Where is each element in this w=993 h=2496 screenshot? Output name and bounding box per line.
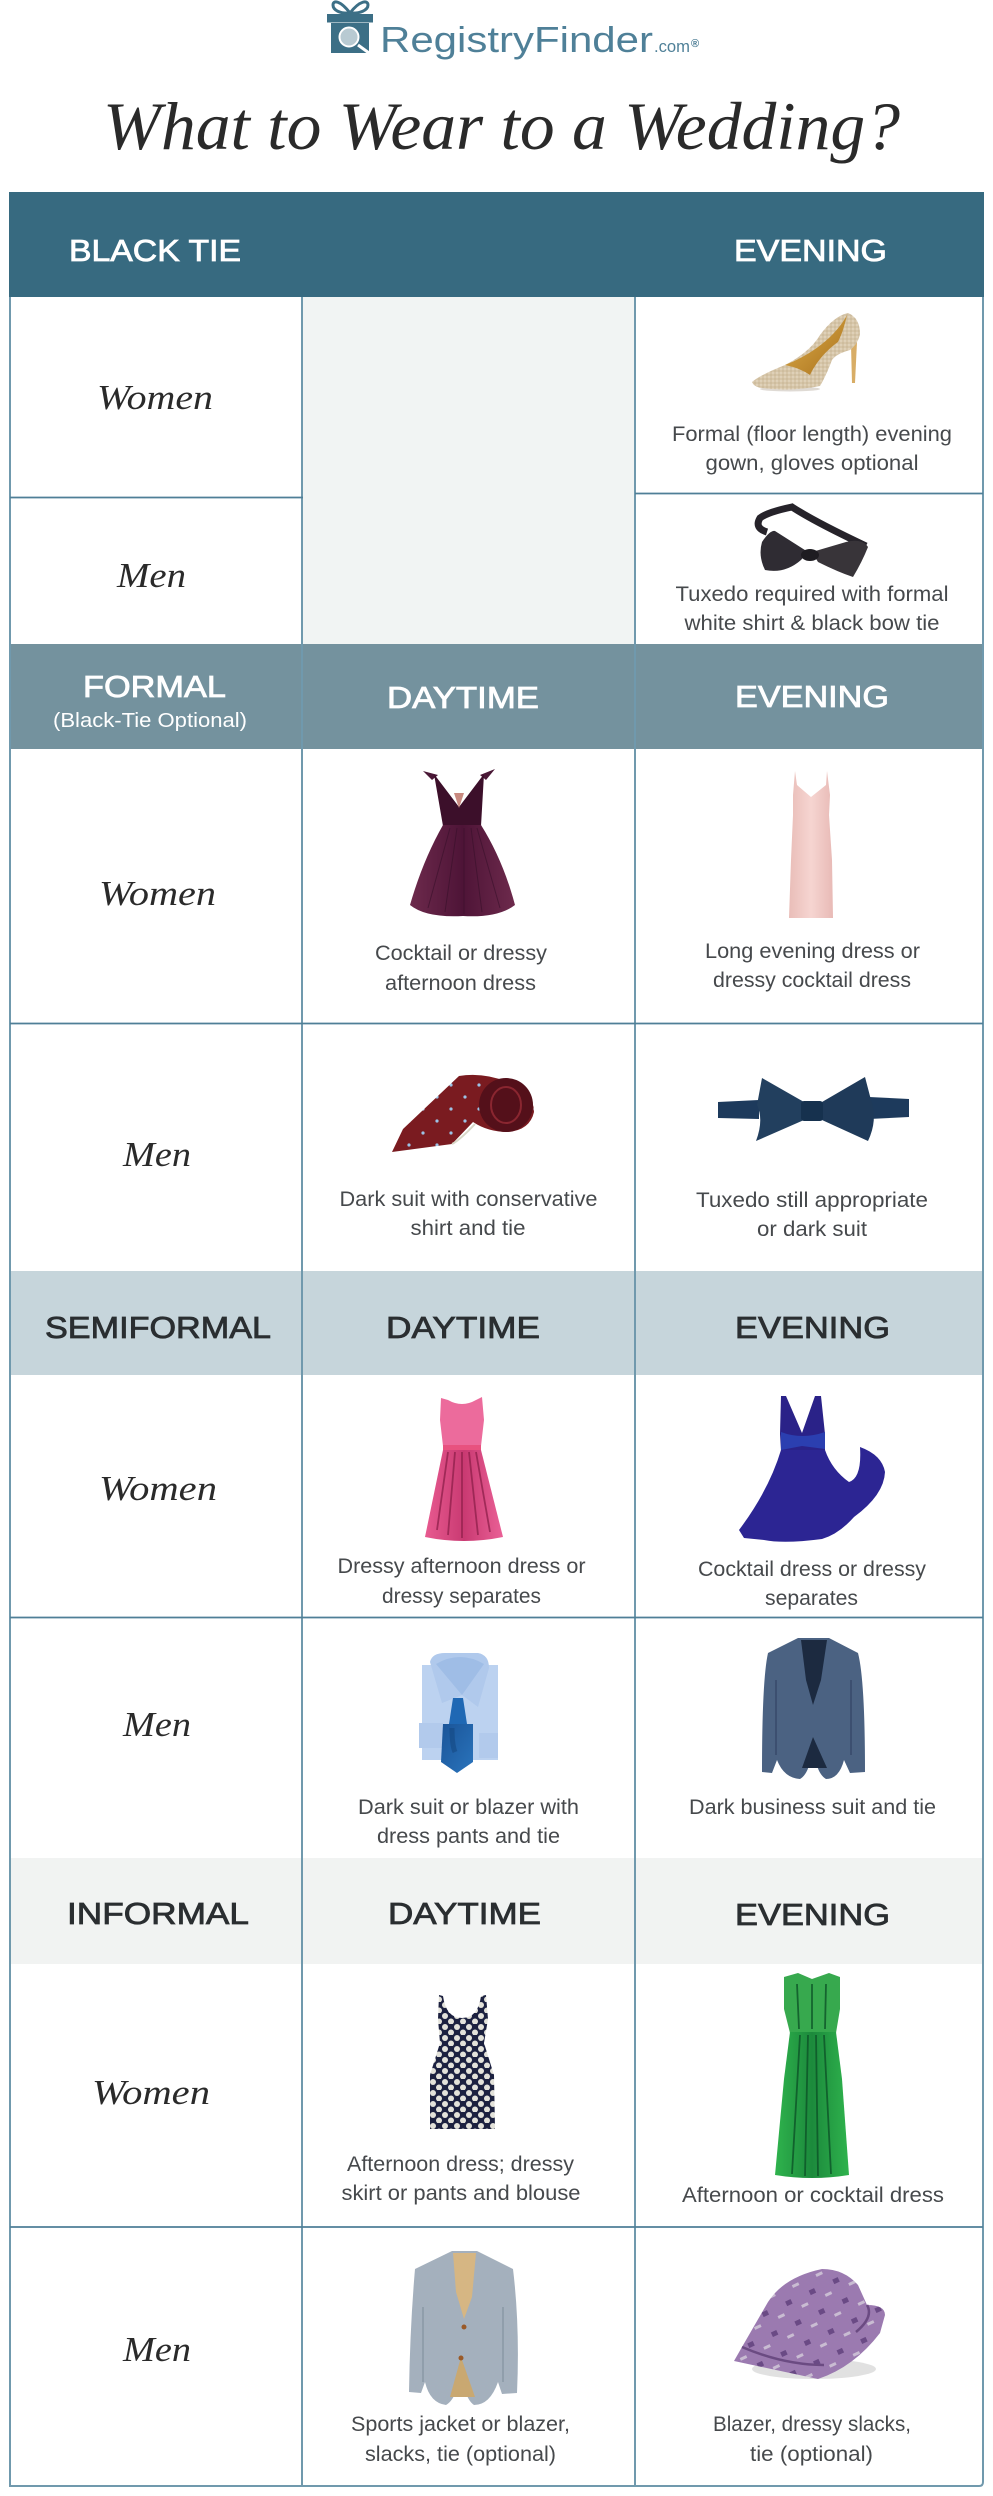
caption: women evening: gown, gloves optional: [706, 452, 918, 475]
caption: men daytime: Dark suit with conservative: [340, 1188, 598, 1211]
icon: navy bow tie: [718, 1077, 909, 1141]
caption: women daytime: [342, 2153, 580, 2205]
row label: men: Men: [116, 556, 186, 595]
caption: women daytime: Dressy afternoon dress or: [338, 1555, 586, 1578]
icon: grey sports jacket: [409, 2251, 518, 2405]
caption: men daytime: [358, 1796, 579, 1848]
icon: blue swing dress: [739, 1396, 885, 1542]
caption: men evening: [676, 583, 948, 635]
caption: women daytime: afternoon dress: [385, 972, 536, 995]
icon: burgundy cocktail dress: [410, 769, 515, 916]
icon: polka dot dress: [430, 1995, 495, 2129]
section: informal: [67, 1896, 944, 2466]
heading: evening: EVENING: [735, 679, 889, 714]
registered mark: ®: [691, 38, 699, 50]
heading: black tie: BLACK TIE: [69, 233, 241, 268]
icon: pink slip dress: [789, 771, 833, 918]
row label: men: Men: [122, 1135, 191, 1174]
caption: women daytime: Cocktail or dressy: [375, 942, 548, 965]
caption: men evening: Tuxedo required with formal: [676, 583, 948, 606]
caption: men daytime: dress pants and tie: [377, 1825, 560, 1848]
heading: evening: EVENING: [735, 1897, 890, 1932]
caption: men evening: Dark business suit and tie: [689, 1796, 936, 1819]
row label: men: Men: [122, 2330, 191, 2369]
caption: women evening: dressy cocktail dress: [713, 969, 911, 992]
heading: semiformal: SEMIFORMAL: [45, 1310, 271, 1345]
heading: daytime: DAYTIME: [387, 680, 539, 715]
caption: men evening: [696, 1189, 928, 1241]
caption: men evening: [713, 2413, 911, 2466]
caption: women evening: separates: [765, 1587, 858, 1610]
logo: RegistryFinder: [327, 2, 699, 60]
caption: women evening: Cocktail dress or dressy: [698, 1558, 926, 1581]
caption: women daytime: [375, 942, 548, 995]
heading: evening: EVENING: [734, 233, 887, 268]
heading: formal: FORMAL: [83, 669, 226, 704]
caption: women daytime: Afternoon dress; dressy: [347, 2153, 575, 2176]
icon: navy blazer: [762, 1638, 865, 1779]
section: semiformal: [45, 1310, 936, 1848]
title: What to Wear to a Wedding?: [103, 88, 900, 164]
section: black tie: [69, 233, 952, 635]
caption: women evening: [698, 1558, 926, 1610]
row label: women: Women: [92, 2073, 210, 2112]
caption: women evening: [705, 940, 920, 992]
subheading: black-tie optional: (Black-Tie Optional): [53, 710, 247, 732]
heading: evening: EVENING: [735, 1310, 890, 1345]
caption: women evening: Long evening dress or: [705, 940, 920, 963]
caption: men evening: white shirt & black bow tie: [683, 612, 940, 635]
icon: purple folded tie: [734, 2269, 885, 2379]
caption: women evening: Formal (floor length) evening: [672, 423, 952, 446]
caption: women daytime: skirt or pants and blouse: [342, 2182, 580, 2205]
icon: dark red tie: [392, 1075, 534, 1152]
caption: men daytime: [351, 2413, 570, 2466]
row label: women: Women: [99, 1469, 217, 1508]
caption: men daytime: Dark suit or blazer with: [358, 1796, 579, 1819]
caption: women evening: [672, 423, 952, 475]
row label: women: Women: [97, 378, 213, 417]
heading: informal: INFORMAL: [67, 1896, 249, 1931]
brand suffix: .com: [654, 37, 690, 56]
icon: glitter high heel: [752, 313, 860, 392]
brand wordmark: RegistryFinder: [380, 19, 653, 60]
caption: women daytime: [338, 1555, 586, 1608]
caption: men daytime: slacks, tie (optional): [365, 2443, 556, 2466]
caption: men daytime: Sports jacket or blazer,: [351, 2413, 570, 2436]
caption: women daytime: dressy separates: [382, 1585, 541, 1608]
heading: daytime: DAYTIME: [386, 1310, 540, 1345]
heading: daytime: DAYTIME: [388, 1896, 541, 1931]
icon: gift box with magnifier: [327, 2, 373, 53]
caption: women evening: Afternoon or cocktail dress: [682, 2184, 944, 2207]
caption: men evening: Tuxedo still appropriate: [696, 1189, 928, 1212]
caption: men daytime: shirt and tie: [410, 1217, 526, 1240]
icon: folded blue shirt and tie: [419, 1653, 498, 1773]
caption: men evening: or dark suit: [757, 1218, 867, 1241]
row label: men: Men: [122, 1705, 191, 1744]
caption: men daytime: [340, 1188, 598, 1240]
caption: men evening: tie (optional): [750, 2443, 873, 2466]
section: formal: [53, 669, 928, 1241]
caption: men evening: Blazer, dressy slacks,: [713, 2413, 911, 2436]
icon: pink afternoon dress: [425, 1397, 503, 1541]
row label: women: Women: [99, 874, 216, 913]
icon: black bow tie: [758, 507, 868, 577]
icon: green long dress: [775, 1973, 849, 2178]
